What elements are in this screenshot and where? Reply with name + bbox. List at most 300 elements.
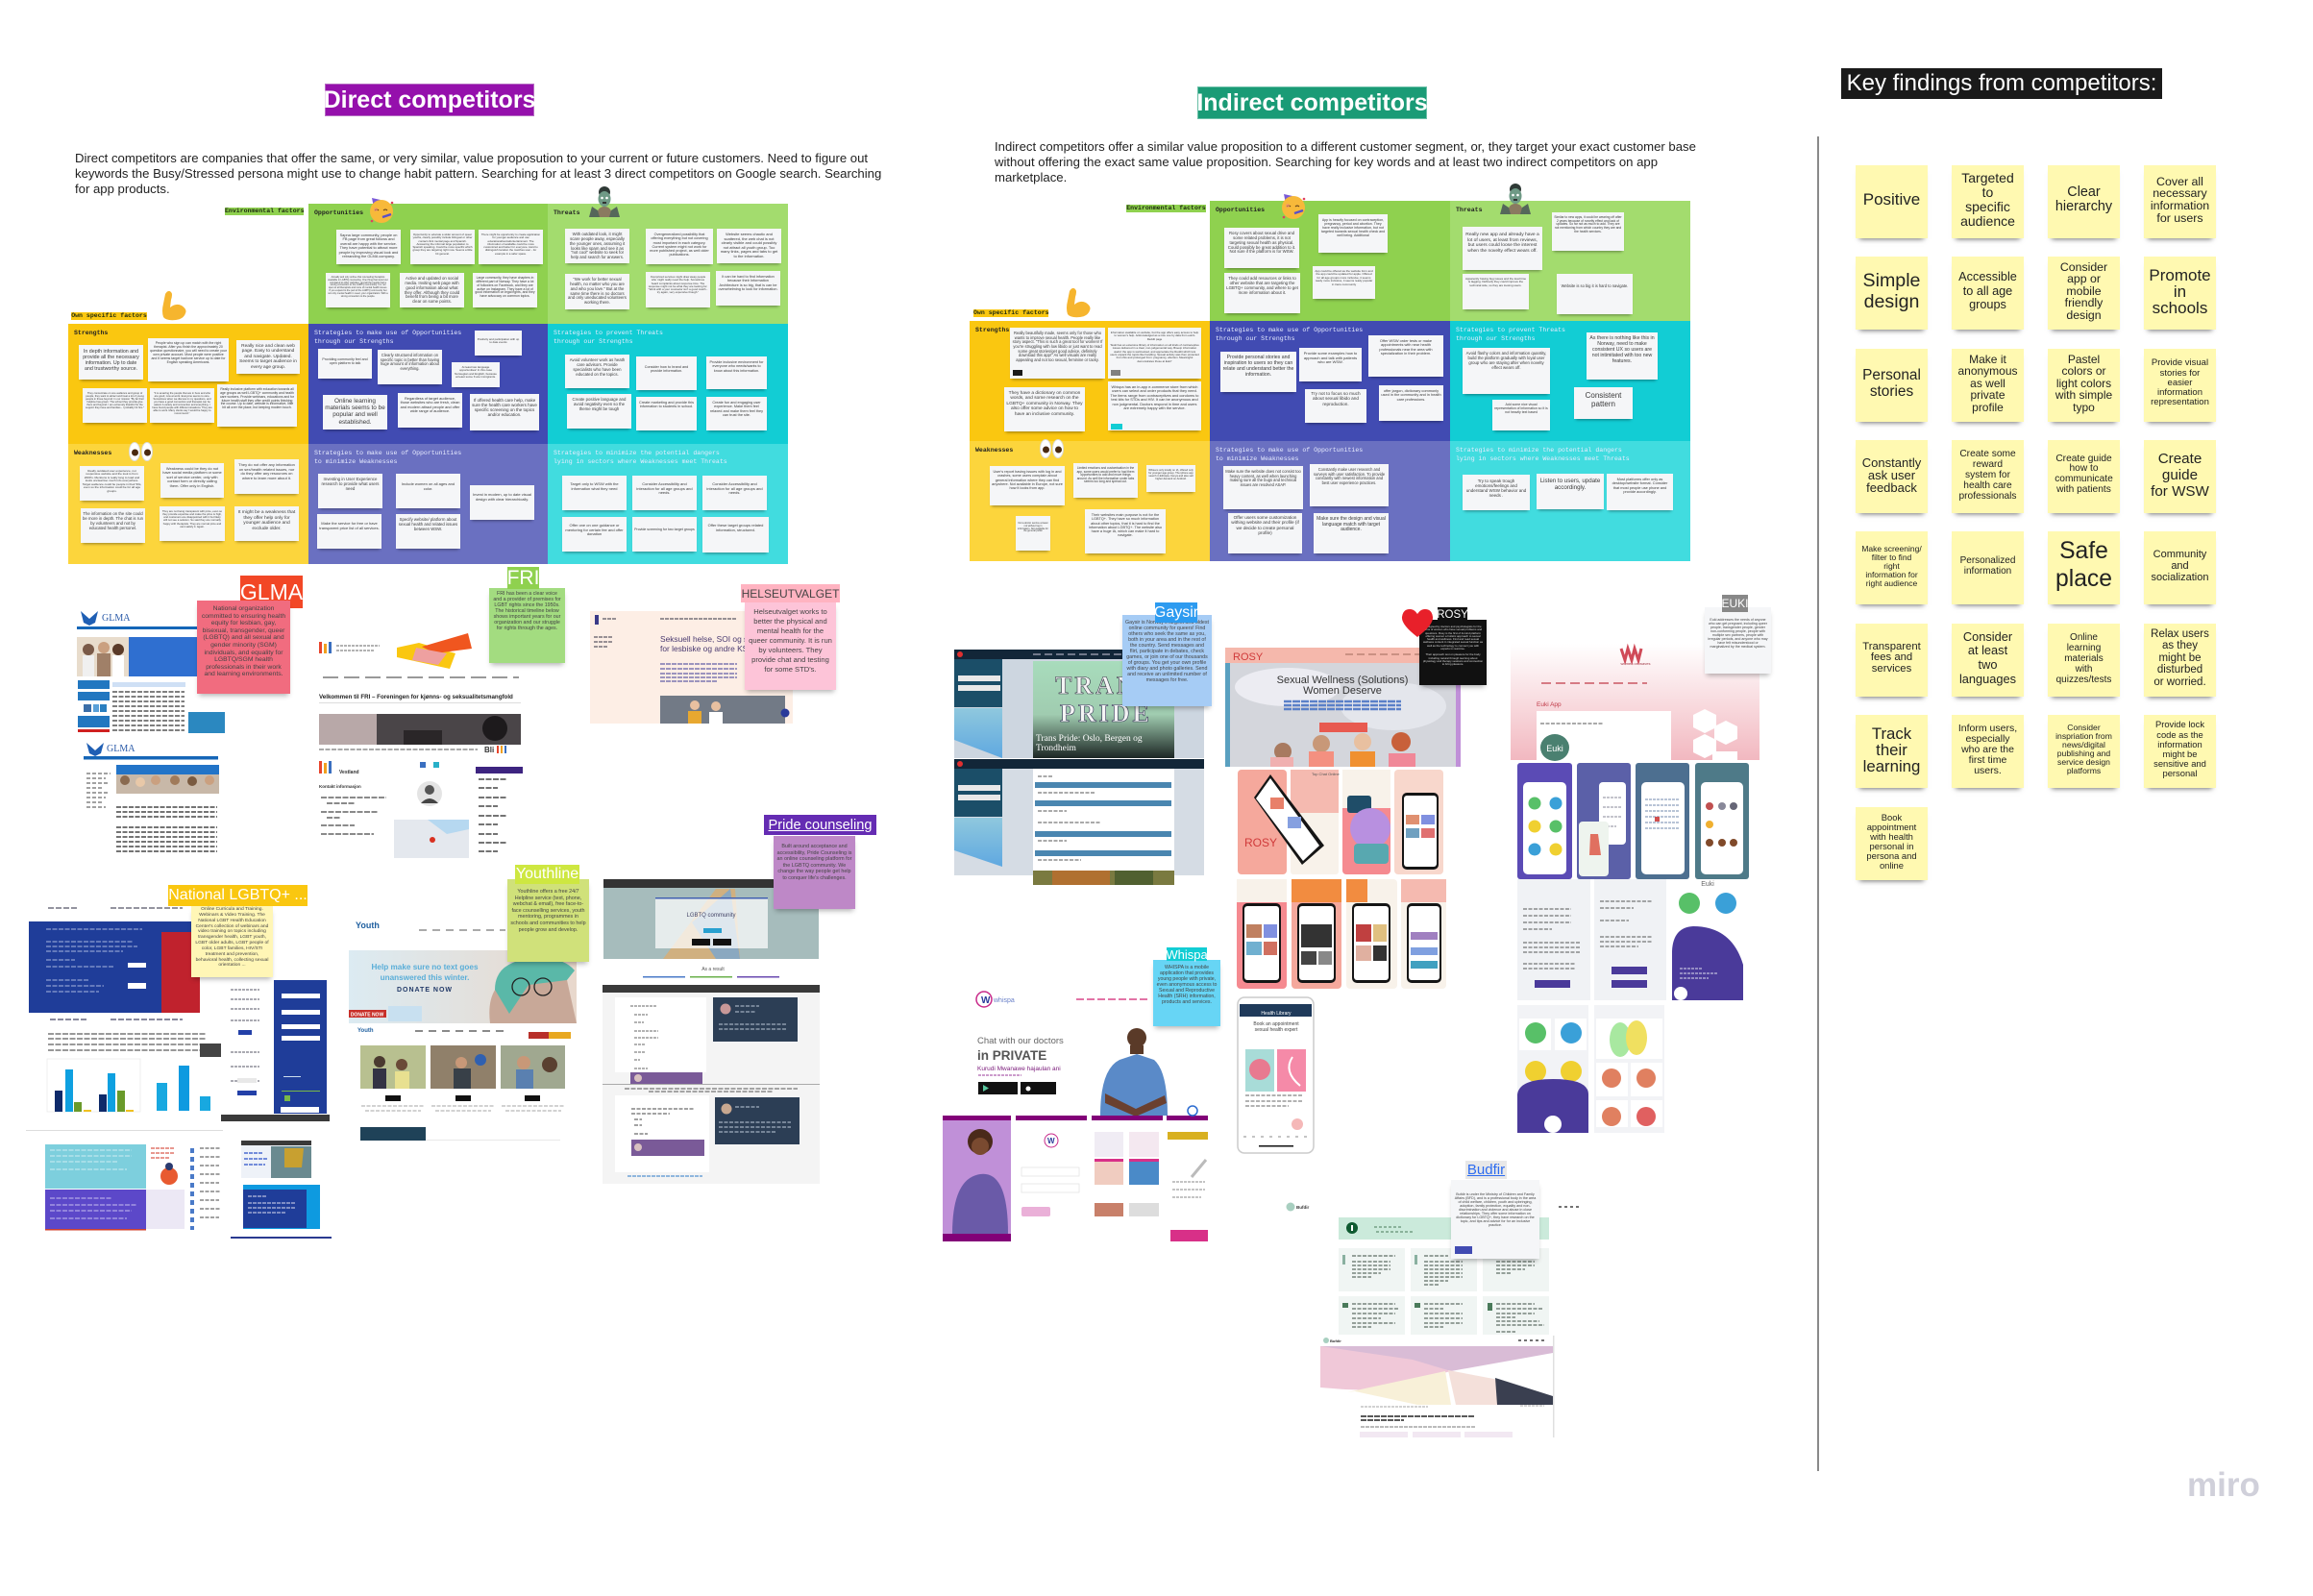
sticky: information for [1865, 569, 1918, 578]
sticky: code as the [2156, 729, 2203, 740]
note [1463, 348, 1550, 394]
sticky [1856, 257, 1928, 330]
sticky: to all age [1963, 284, 2012, 298]
note [702, 517, 769, 552]
panel: direct threats: Threats [554, 209, 580, 216]
note: Consider Accessibility and interaction for all age groups and needs. [706, 481, 763, 495]
sticky: Pastel [2068, 353, 2100, 366]
note: User's report having issues with log in and crashes, some users complain about general information where they can find anywhere. Not available in Europe, not sure how it looks from app. [992, 470, 1063, 490]
note [1228, 513, 1302, 553]
sticky: first time [1969, 753, 2006, 765]
note: Overpriced services might draw away people who might really need the help. Sometimes heard complaints about response time. The response might not be what they are looking for. "Work with a your counselor isn't a good match - try again, very expensive though." [649, 275, 707, 294]
sticky: Consider [2060, 260, 2107, 274]
sticky [2048, 715, 2120, 788]
callout: Helseutvalget: Helseutvalget works to better the physical and mental health for the queer community. It is run by volunteers. They provide chat and testing for some STD's. [749, 607, 832, 674]
note [234, 459, 299, 494]
note [1016, 516, 1050, 551]
note [706, 397, 767, 430]
sticky: publishing and [2057, 749, 2110, 758]
note: Consistent pattern [1586, 391, 1621, 408]
sticky: system for [1965, 469, 2010, 480]
note [160, 506, 225, 541]
note [1463, 475, 1530, 510]
note: Provide screening for two target groups [634, 528, 695, 531]
note: Offer these target groups related information, structured. [708, 523, 763, 532]
sticky: feedback [1866, 480, 1917, 494]
note: Listen to users, update accordingly. [1540, 478, 1600, 491]
sticky [1856, 165, 1928, 238]
sticky: socialization [2152, 572, 2208, 583]
sticky: communicate [2055, 474, 2113, 484]
sticky: as well [1970, 377, 2005, 390]
note: Sapna large community, people on FB page from great follows and overall are happy with the service. They have potential to attract more people by improving visual look and rebranding the GLMA company. [339, 233, 398, 258]
sticky: personal in [1870, 841, 1913, 851]
note [1010, 328, 1105, 379]
sticky [2144, 624, 2216, 697]
note [1463, 227, 1542, 270]
Rosy app store screenshots [1237, 770, 1446, 989]
sticky: Targeted [1961, 170, 2014, 185]
sticky: Simple [1863, 270, 1920, 291]
note [160, 463, 224, 498]
sticky: app or [2067, 272, 2101, 285]
GLMA site screenshot 2 [84, 743, 219, 851]
note: "It is amazing the people that are in here and who are good, now at work. Everyone seems to care. Sometimes when we discuss in my questions, and you have a good connection and therapist can be asked. A variety and connection and everything. I have found people with different situations. They are able to work. Many clients say I would be happy to recommend." [152, 392, 212, 415]
note [567, 394, 631, 429]
note: There might be opportunity to create application for younger audience and use educational/social/entertainment. The information of available could be more customized and better for everyone. Hard to distinguish location the matches user - for example in a safer space. [481, 233, 540, 256]
note: Online learning materials seems to be popular and well established. [325, 398, 385, 426]
note: Make sure the website does not consist too heavy content, as well when launching making sure all the bugs and technical issues are resolved ASAP. [1225, 469, 1301, 487]
callout: Bufdir: Bufdir is under the Ministry of Children and Family Affairs (BFD), and is a professional body in the area of child welfare, children, youth and upbringing, adoption, family protection, equality and non-discrimination and violence and abuse in close relationships. They offer some information on dictionary for LGBTQ+, they have research on the topic, and tips and advice for for an inclusive practice. [1455, 1192, 1536, 1227]
note: Really nice and clean web page. Easy to understand and navigate. Updated. Seems to target audience in every age group. [239, 344, 297, 370]
callout: FRI: FRI has been a clear voice and a provider of premises for LGBT rights since the 1950s. The historical timeline below shows important years for our organization and our struggle for rights through the ages. [493, 591, 561, 631]
icon: eyes [129, 442, 152, 461]
Pride counseling site screenshots: As a result [701, 967, 725, 972]
note [81, 508, 145, 543]
note [1305, 389, 1366, 423]
Rosy phone screenshot [1238, 997, 1314, 1153]
sticky: Constantly [1862, 455, 1921, 469]
note: Really inclusive platform with education towards all age groups as well LGBTQ+ community and health care workers. Provide webinars, educations and for future health staff they offer credit points finishing the course. Up to date, website is informative, little bit all over the place, but keeping modern touch. [220, 387, 294, 409]
sticky [2144, 165, 2216, 238]
note [318, 349, 372, 379]
sticky [2144, 531, 2216, 604]
callout: National LGBTQ+: Online Curricula and Training. Webinars & Video Training. The National LGBT Health Education Center's collection of webinars and video training on topics including transgender health, LGBT youth, LGBT older adults, LGBT people of color, LGBT families, HIV/STI treatment and prevention, behavioral health, collecting sexual orientation ... [195, 907, 269, 968]
label: Pride counseling: Pride counseling [769, 817, 872, 832]
sticky [1952, 257, 2024, 330]
icon: flexed bicep [162, 291, 186, 320]
note: Provide personal stories and inspiration to users so they can relate and understand better the information. [1223, 355, 1293, 378]
note [1220, 352, 1296, 392]
icon: zombie [589, 186, 620, 217]
label: Budfir: Budfir [1467, 1162, 1505, 1178]
FRI site screenshot: Velkommen til FRI – Foreningen for kjønns- og seksualitetsmangfold [319, 694, 513, 700]
swatch: cyan marker [1111, 424, 1122, 430]
label: National LGBTQ+: National LGBTQ+ ... [168, 887, 308, 903]
sticky: colors or [2061, 364, 2106, 378]
sticky: Create some [1959, 448, 2016, 459]
note: Make the service for free or have transparent price list of all services. [319, 521, 380, 530]
sticky [1856, 440, 1928, 513]
sticky: guide [2162, 467, 2198, 482]
note: Provide inclusive environment for everyone who needs/wants to know about this information. [710, 360, 763, 373]
note [470, 394, 539, 430]
callout: Euki [1705, 607, 1771, 674]
tag: own specific factors: Own specific factors [973, 309, 1049, 316]
callout: Euki: Euki addresses the needs of anyone who can get pregnant, including queer people, transgender people, gender non-conforming people, people with multiple sex partners, people with irregular periods, and anyone who may have felt misunderstood or marginalized by the medical system. [1708, 618, 1768, 649]
note: Information available on website, but the app offers easy access to help to women's help. Acknowledged as a nice one by data from euki's Reddit page [1111, 331, 1198, 341]
icon: flexed bicep [1067, 288, 1090, 317]
note: Apparently having bug issues and the load time is lagging. Definetly they could improve the technical side, so they are loosing users. [1465, 277, 1526, 287]
Euki site screenshot: Euki [1546, 744, 1563, 753]
note: Similar to new apps, it could be wearing off after 2 years because of novelty effect and lack of updates. So far not as much to add. They are not mentioning from which country they are and the health services. [1554, 215, 1622, 233]
panel: direct threats [548, 204, 788, 324]
tag: environmental factors: Environmental factors [225, 208, 305, 214]
divider line [1817, 136, 1819, 1471]
FRI site screenshot [319, 633, 523, 858]
note [396, 514, 460, 549]
note [326, 273, 390, 307]
callout: ROSY [1419, 620, 1487, 685]
sticky [2048, 349, 2120, 422]
sticky: stories for [2160, 368, 2200, 379]
note: Most platforms offer only as desktop/website format. Consider that most people use phone and provide accordingly. [1612, 477, 1667, 494]
note [1310, 464, 1389, 506]
note [1146, 465, 1195, 492]
description: direct competitors: keywords the Busy/Stressed persona might use to change habit pattern. Searching for at least 3 direct competitors on Google search. Searching [75, 166, 881, 181]
note [1108, 328, 1201, 379]
note [80, 466, 144, 501]
note: App is heavily focused on contraception, pregnancy, period and abortion. They have really inclusive information, but not targeted towards sexual health check and well being. Additional [1321, 218, 1385, 237]
sticky [2144, 257, 2216, 330]
note: With outdated look, it might scare people away, especially the younger ones, assuming it looks like spam and see it as "not cool" website to seek for help and search for answers. [570, 232, 625, 259]
Helseutvalget site screenshot: for lesbiske og andre KSK [660, 644, 753, 653]
callout: Bufdir [1451, 1180, 1539, 1259]
sticky: learning [2067, 642, 2101, 653]
note [470, 485, 534, 520]
Euki site screenshot: Euki App [1537, 701, 1562, 708]
Youthline site screenshot: unanswered this winter. [381, 973, 469, 982]
callout: Youthline: Youthline offers a free 24/7 Helpline service (text, phone, webchat & email), free face-to-face counselling services, youth mentoring, programmes in schools and communities to help people grow and develop. [510, 889, 586, 933]
note [317, 514, 381, 549]
sticky: necessary [2153, 186, 2207, 200]
Gaysir site screenshots: TRAN [1055, 672, 1138, 700]
sticky: Safe [2059, 538, 2108, 564]
panel: direct weaknesses: Weaknesses [74, 450, 111, 456]
sticky: Book [1882, 812, 1902, 823]
note [1313, 266, 1375, 299]
panel: indirect strategies opportunities strengths [1210, 321, 1450, 441]
note: Really outdated user experience, not responsive website and the look is from 2000's. Mentions is really long to load and looks unclear/too much info everywhere. Target audience could be people in their 50s, even so the information could be for all age groups. [83, 469, 141, 493]
panel: indirect weaknesses: Weaknesses [975, 447, 1013, 454]
sticky: who are the [1961, 744, 2014, 755]
sticky: Relax users [2151, 628, 2209, 640]
Bufdir site screenshots: Bufdir [1330, 1338, 1341, 1343]
sticky: right [1883, 561, 1900, 571]
note [1537, 474, 1604, 509]
sticky: Make it [1969, 353, 2006, 366]
Rosy phone screenshot: Book an appointment [1253, 1021, 1299, 1027]
sticky: Accessible [1958, 270, 2017, 283]
sticky [1856, 715, 1928, 788]
sticky: audience [1960, 213, 2015, 229]
note [1574, 387, 1633, 419]
sticky: Create [2158, 450, 2202, 467]
note: Constantly make user research and surveys with user satisfaction. To provide constantly with newest information and best user experience practices. [1314, 467, 1385, 485]
callout: FRI [489, 588, 565, 663]
miro logo: miro [2187, 1466, 2260, 1504]
sticky [2048, 257, 2120, 330]
label: FRI: FRI [507, 567, 539, 588]
icon: party face [1282, 194, 1305, 219]
Whispa site screenshot: W [981, 995, 991, 1006]
panel: direct weaknesses [68, 444, 308, 564]
swatch: gray marker [1111, 370, 1120, 376]
note: They have a dictionary on common words, and some research on the LGBTQ+ community in Norway. They also offer some advice on how to have an inclusive community. [1006, 391, 1083, 417]
note: In depth information and provide all the necessary information. Up to date and trustworthy source. [83, 349, 139, 372]
sticky [1952, 440, 2024, 513]
note: Regardless of target audience, those websites who are fresh, clean and modern attract people and offer wide range of audience. [401, 396, 459, 413]
description: indirect competitors: Indirect competitors offer a similar value proposition to a different customer segment, or, they target your exact customer base [995, 139, 1696, 154]
sticky: anonymous [1957, 364, 2018, 378]
note: The information on the site could be more in depth. The chat is run by volunteers and not by educated health personel. [83, 511, 143, 530]
Euki app screenshots [1517, 763, 1749, 1133]
Euki site screenshot: women on waves [1621, 661, 1650, 666]
note: Clearly structured information on specific topic is better than having huge amount of information about everything. [381, 353, 439, 371]
note: offer jargon, dictionary commonly used in the community and in health care professions. [1381, 388, 1441, 402]
panel: direct strategies weaknesses threats [548, 444, 788, 564]
note: Providing community feel and open platform to talk [322, 357, 368, 365]
Helseutvalget site screenshot [590, 611, 793, 724]
note [473, 273, 537, 307]
sticky: how to [2069, 463, 2099, 474]
note: At least two language opportunities! In this case Norwegian and English, because at least some ft are immigrants. [455, 365, 497, 379]
sticky: might be [2158, 652, 2202, 664]
sticky: Consider [1963, 629, 2012, 644]
sticky: their [1876, 740, 1907, 759]
Rosy site screenshot: ROSY [1233, 651, 1264, 663]
sticky: service design [2057, 757, 2110, 767]
note: Make sure the design and visual language match with target audience. [1316, 516, 1386, 532]
panel: indirect strengths: Strengths [975, 327, 1009, 333]
note: Investing in User Experience research to provide what users need [321, 477, 380, 491]
sticky: hierarchy [2055, 199, 2112, 214]
note: Avoid flashy colors and information quantity, build the platform gradually with loyal user group who are staying after when novelty effect wears off. [1466, 351, 1546, 370]
sticky: schools [2153, 298, 2207, 317]
sticky: Clear [2067, 184, 2101, 200]
sticky [1952, 531, 2024, 604]
panel: direct strategies weaknesses threats: Strategies to minimize the potential dangers lying in sectors where Weaknesses meet Threats [554, 450, 727, 465]
Gaysir site screenshots: Trans Pride: Oslo, Bergen og [1036, 734, 1143, 744]
title: indirect competitors: Indirect competitors [1196, 88, 1428, 115]
note: People who sign up can match with the right therapist. After you finish the approximately 20 question questionnaire, you will need to create your own private account. Most people were positive and it seems target had/one service up to date for English speaking Americans. [150, 341, 227, 364]
note [636, 356, 697, 390]
Whispa site screenshot [943, 992, 1208, 1241]
sticky: in [2174, 282, 2186, 300]
Whispa site screenshot: W [1047, 1137, 1055, 1145]
note [717, 229, 781, 263]
Youthline site screenshot [349, 921, 577, 1141]
note: Actually and only online chat counseling therapists available in LGBTQ counseling. One thing that stood out compared to other websites, and all the people had a strong connection to the LGBTQ community. It is not open to all therapists and more of mental health issues. If you expand to the part of the LGBTQ community but not only mental health in need, your organization. With a strong connection to the people. [328, 276, 388, 298]
callout: Pride counseling: Built around acceptance and accessibility, Pride Counseling is an online counseling platform for the LGBTQ community. We change the way people get help to conquer life's challenges. [777, 844, 851, 881]
sticky [1952, 624, 2024, 697]
sticky: Transparent [1862, 641, 1921, 652]
note [150, 388, 214, 423]
note: It might be a weakness that they offer help only for younger audience and exclude older. [238, 510, 295, 531]
GLMA site screenshot 2: GLMA [107, 744, 135, 754]
note: Active and updated on social media. Inviting web page with good information about what they offer. Although they could benefit from being a bit more clear on some points. [405, 276, 459, 304]
panel: indirect opportunities: Opportunities [1216, 207, 1265, 213]
Helseutvalget site screenshot: Seksuell helse, SOI og s [660, 634, 748, 644]
note [479, 230, 543, 264]
callout: Gaysir: Gaysir is Norway's largest and oldest online community for queers! Find others who seek the same as you, both in your area and in the rest of the country. Send messages and flirt, participate in debates, check games, or join one of our thousands of groups. You get your own profile with diary and photo galleries. Send and receive an unlimited number of messages for free. [1125, 620, 1209, 683]
note: Large community, they have chapters in different part of Norway. They have a lot of followers on Facebook, and they are active on Instagram. They have a lot of good information on legal rights, and they have advocacy on common topics. [475, 276, 535, 298]
label: ROSY: ROSY [1437, 609, 1468, 621]
note [1463, 274, 1529, 309]
panel: direct strategies opportunities strengths: Strategies to make use of Opportunities through our Strengths [314, 330, 461, 345]
sticky: Track [1872, 724, 1911, 742]
description: indirect competitors [995, 139, 1696, 184]
note [378, 350, 442, 384]
GLMA site screenshot 1: GLMA [102, 613, 131, 624]
sticky: for WSW [2151, 482, 2209, 500]
note: Invest in modern, up to date visual design with clear hierarchically. [473, 492, 531, 502]
sticky [1952, 349, 2024, 422]
sticky: for users [2156, 211, 2203, 225]
sticky: typo [2073, 401, 2095, 414]
note: Offer one on one guidance or mentoring for certain fee and offer donation [565, 523, 624, 536]
swatch: blue marker [1455, 1246, 1472, 1254]
FRI site screenshot: Vestland [339, 770, 359, 775]
sticky: disturbed [2157, 664, 2202, 675]
note: Not a doctor service at least not without log in information. Not available for the general public [1018, 522, 1048, 532]
Youthline site screenshot: Help make sure no text goes [371, 963, 479, 971]
sticky: private [1970, 388, 2005, 402]
Rosy app store screenshots: ROSY [1244, 836, 1277, 849]
sticky: appointment [1867, 822, 1916, 832]
note [702, 476, 767, 510]
callout: ROSY: Their approach rest on pleasure for the body including natural through learning about physiology and therapy sessions and connection to bring pleasure. [1423, 652, 1483, 666]
note [398, 393, 462, 428]
note: Opportunity to educate a wider amount of queer youths, clearly possibly include bilingual or other contact click mental page and Spanish. Answering the informal large population to Spanish speaking. Could be more specific which group they are targeting right now. Seems a little bit general. [412, 233, 473, 256]
note: It can be hard to find information because their Information Architecture is so big, that is can be overwhelming to look for information. [718, 275, 778, 291]
sticky: fees and [1871, 651, 1912, 663]
note [1108, 381, 1201, 430]
note: Weakness could be they do not have social media platform or some sort of service center, only with contact form or directly calling them. Offer only in English. [162, 466, 222, 488]
callout: Gaysir [1122, 615, 1212, 706]
panel: indirect threats [1450, 201, 1690, 321]
note [1224, 228, 1299, 268]
panel: indirect weaknesses [970, 441, 1210, 561]
note: Consider Accessibility and interaction for all age groups and needs. [636, 481, 693, 495]
panel: indirect strategies opportunities weaknesses [1210, 441, 1450, 561]
Youthline site screenshot: Youth [356, 921, 380, 930]
sticky: profile [1972, 401, 2004, 414]
panel: direct strategies opportunities strengths [308, 324, 548, 444]
note [646, 272, 710, 307]
sticky: Consider [2067, 723, 2101, 732]
sticky: to [1982, 184, 1993, 200]
Rosy site screenshot: Sexual Wellness (Solutions) [1277, 675, 1408, 686]
note [1314, 513, 1389, 553]
Youthline site screenshot: Youth [357, 1028, 374, 1034]
sticky: light colors [2056, 377, 2111, 390]
tag: environmental factors: Environmental factors [1126, 205, 1206, 211]
panel: direct strengths: Strengths [74, 330, 108, 336]
sticky: design [1864, 291, 1919, 312]
sticky: health care [1963, 480, 2012, 490]
panel: indirect threats: Threats [1456, 207, 1483, 213]
FRI site screenshot: Kontakt informasjon [319, 784, 361, 789]
sticky: Provide visual [2152, 357, 2208, 368]
sticky [2048, 531, 2120, 604]
note [636, 397, 697, 430]
note [565, 229, 629, 263]
callout: Helseutvalget [745, 602, 836, 690]
sticky: Positive [1863, 190, 1920, 209]
note [318, 474, 382, 508]
sticky: especially [1965, 732, 2010, 744]
sticky [1856, 624, 1928, 697]
sticky: reward [1973, 459, 2003, 469]
note [400, 273, 464, 307]
sticky: place [2055, 566, 2112, 592]
sticky: information [2157, 739, 2202, 749]
note: App could be offered as the website form and the app could be updated for apple. Offered for all age groups more inclusive, it seems ready more inclusive, it seems ready popular in trans community [1315, 269, 1373, 286]
note: Offer WSW order tests or make appointments with near health professionals near the area with specialization in their problem. [1379, 338, 1433, 356]
note [1368, 335, 1443, 377]
note: Limited emotions and customisation in the app, some users would prefer to had them opportunities to add and move things around. As well the information under tabs seems too long and spread out. [1077, 466, 1134, 483]
panel: direct opportunities: Opportunities [314, 209, 363, 216]
Euki app screenshots: Euki [1701, 881, 1714, 888]
note [217, 384, 297, 427]
sticky [2144, 715, 2216, 788]
sticky: languages [1959, 672, 2016, 686]
note: They do not offer any information on sex/health related issues, nor do they offer any resources on where to learn more about it. [238, 462, 295, 480]
sticky [2144, 440, 2216, 513]
note: Avoid volunteer work as heath care advisors. Provide specialists who have been educated on the topics. [570, 357, 625, 377]
note: Really new app and already have a lot of users, at least from reviews, but users could loose the interest when the novelty effect wears off. [1465, 233, 1539, 254]
description: indirect competitors: marketplace. [995, 170, 1067, 184]
callout: Pride counseling [774, 836, 855, 909]
panel: indirect strategies weaknesses threats: Strategies to minimize the potential dangers lying in sectors where Weaknesses meet Threats [1456, 447, 1630, 462]
panel: direct strategies threats strengths: Strategies to prevent Threats through our Strengths [554, 330, 663, 345]
note [1073, 463, 1138, 498]
note: Create marketing and provide this information to students in school. [639, 401, 694, 408]
sticky: materials [2064, 653, 2104, 663]
note [1552, 212, 1624, 251]
sticky: with patients [2056, 484, 2111, 495]
sticky: as they [2162, 640, 2198, 651]
note: "Euki has an extensive library of information on all kinds of contraceptive issues delivered in a clear, non-judgemental way. Bioexp information useful: the app is well-looked, and appreciate the Reddit which lets users unpack the topics like handling. Sexual activity was then protected from this and prolonged from: pregnancy, abortion. Meaningful demonstrates those at Euki" [1110, 343, 1199, 363]
sticky: users. [1974, 765, 2002, 776]
note: Whispa has an in-app e-commerce store from which users can select and order products that they need. The items range from contraceptives and condoms to test kits for STDs and HIV. It can be anonymous and non judgmental. Doctors respond in time and users are extremely happy with the service. [1111, 384, 1198, 410]
panel: indirect opportunities [1210, 201, 1450, 321]
sticky: sensitive and [2153, 758, 2206, 769]
panel: indirect strategies opportunities strengths: Strategies to make use of Opportunities through our Strengths [1216, 327, 1363, 342]
note: They could add resources or links to other website that are targeting the LGBTQ+ community, and where to get more information about it. [1226, 276, 1298, 295]
Whispa site screenshot: in PRIVATE [977, 1048, 1046, 1063]
note: Provide some examples how to approach and talk with patients who are WSW. [1304, 351, 1357, 364]
Pride counseling site screenshots: LGBTQ community [686, 913, 736, 919]
sticky: ask user [1868, 467, 1915, 482]
note: Create positive language and avoid negativity even so the theme might be tough [573, 397, 626, 411]
Bufdir site screenshots [1286, 1203, 1580, 1437]
note [565, 355, 629, 388]
note [234, 506, 299, 541]
note [1492, 400, 1550, 430]
note [1379, 385, 1443, 421]
